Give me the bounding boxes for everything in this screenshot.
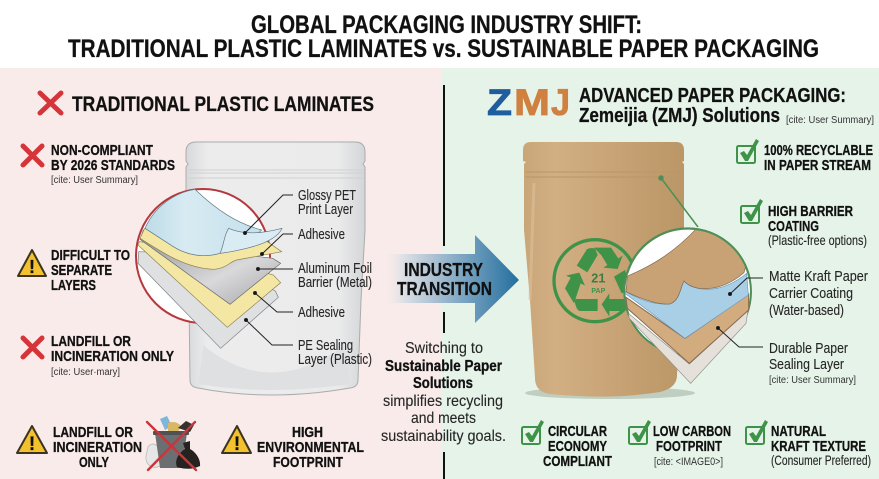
text: landfill or incineration only	[53, 424, 142, 471]
heading: advanced paper packaging	[579, 85, 874, 127]
kraft pouch	[523, 142, 684, 397]
icon: warning difficult	[18, 250, 46, 277]
icon: cross landfill	[23, 338, 42, 357]
text: landfill or incineration	[51, 333, 174, 378]
laminate layers	[138, 189, 282, 348]
icon: heading cross	[40, 93, 61, 113]
icon: warning landfill: !	[29, 434, 35, 455]
text: low carbon	[653, 423, 731, 468]
text: non-compliant	[51, 142, 175, 186]
magnifier: paper layers	[624, 227, 757, 383]
recycle badge	[554, 240, 636, 322]
text: landfill or incineration only: INCINERATION	[53, 439, 142, 456]
layer labels: Barrier (Metal)	[298, 274, 372, 291]
text: high barrier: HIGH BARRIER	[768, 203, 853, 220]
logo: ZMJ	[487, 82, 570, 123]
arrow: industry transition	[383, 235, 519, 323]
layer labels: Adhesive	[298, 304, 345, 321]
icon: cross non-compliant	[23, 146, 42, 165]
arrow: industry transition: INDUSTRY	[404, 260, 483, 280]
text: high environmental footprint: ENVIRONMENTAL	[257, 439, 364, 456]
icon: warning landfill	[17, 426, 47, 455]
leader lines	[244, 195, 293, 345]
text: difficult to separate	[51, 247, 130, 294]
icon: check kraft	[746, 420, 768, 444]
text: transition summary: Switching to	[405, 340, 483, 357]
text: transition summary: simplifies recycling	[383, 393, 503, 410]
layer: PE sealing	[138, 252, 278, 348]
paper layer labels	[769, 268, 868, 386]
layer: aluminum foil	[140, 230, 281, 304]
paper leader lines	[716, 278, 763, 347]
paper layer labels: (Water-based)	[769, 302, 844, 319]
icon: warning footprint: !	[234, 434, 240, 455]
text: low carbon: LOW CARBON	[653, 423, 731, 440]
text: circular economy: COMPLIANT	[543, 453, 612, 470]
magnifier circle	[136, 189, 270, 323]
text: natural kraft: NATURAL	[771, 423, 826, 440]
icon: warning footprint	[222, 426, 251, 455]
logo: ZMJ: M	[514, 82, 550, 123]
title: GLOBAL PACKAGING INDUSTRY SHIFT:	[251, 11, 642, 39]
text: high environmental footprint: HIGH	[292, 424, 323, 441]
icon: check low carbon	[629, 420, 651, 444]
layer labels: PE Sealing	[298, 337, 353, 354]
layer labels	[298, 187, 372, 368]
text: landfill or incineration only: ONLY	[79, 454, 109, 471]
text: natural kraft	[771, 423, 871, 468]
text: low carbon: [cite: <IMAGE0>]	[654, 456, 723, 468]
paper layer labels: Durable Paper	[769, 340, 848, 357]
text: difficult to separate: SEPARATE	[51, 262, 112, 279]
icon: check circular	[522, 420, 544, 444]
divider	[443, 85, 445, 479]
layer: durable kraft	[626, 294, 749, 363]
icon: check recyclable	[737, 139, 759, 163]
panel: traditional plastic laminates	[17, 93, 374, 471]
text: high environmental footprint	[257, 424, 364, 471]
icon: warning difficult: !	[29, 257, 35, 277]
layer labels: Adhesive	[298, 226, 345, 243]
leader: pouch to detail	[659, 176, 698, 227]
kraft pouch shadow	[525, 387, 695, 399]
paper layer labels: [cite: User Summary]	[769, 375, 856, 386]
text: non-compliant: [cite: User Summary]	[51, 175, 138, 186]
layer: adhesive upper	[140, 228, 282, 269]
plastic pouch	[186, 142, 365, 395]
text: high environmental footprint: FOOTPRINT	[273, 454, 343, 471]
text: landfill or incineration: INCINERATION ONLY	[51, 348, 174, 365]
panel: left background	[0, 68, 442, 479]
magnifier circle	[624, 228, 751, 355]
paper layer labels: Carrier Coating	[769, 285, 853, 302]
heading: advanced paper packaging: Zemeijia (ZMJ) Solutions	[579, 105, 780, 127]
icon: crossed-out trash can	[146, 416, 200, 470]
paper layer labels: Sealing Layer	[769, 356, 844, 373]
layer labels: Glossy PET	[298, 187, 356, 204]
text: landfill or incineration: LANDFILL OR	[51, 333, 131, 350]
recycle badge: PAP	[591, 288, 606, 295]
logo: ZMJ: J	[551, 82, 570, 123]
heading: traditional plastic laminates: TRADITIONAL PLASTIC LAMINATES	[72, 93, 374, 116]
arrow: industry transition: TRANSITION	[397, 279, 492, 299]
layer labels: Aluminum Foil	[298, 260, 372, 277]
text: circular economy: CIRCULAR	[548, 423, 607, 440]
layer: sealing	[628, 310, 748, 383]
text: transition summary: and meets	[411, 410, 476, 427]
text: low carbon: FOOTPRINT	[656, 438, 722, 455]
layer labels: Layer (Plastic)	[298, 351, 372, 368]
layer: blue coating	[625, 273, 748, 338]
title	[68, 11, 819, 63]
layer: PET curl	[220, 228, 282, 253]
text: recyclable	[764, 142, 873, 174]
text: difficult to separate: DIFFICULT TO	[51, 247, 130, 264]
text: transition summary	[381, 340, 506, 445]
icon: check barrier	[741, 199, 763, 223]
text: landfill or incineration only: LANDFILL OR	[53, 424, 133, 441]
text: circular economy	[543, 423, 612, 470]
layer: adhesive lower	[138, 242, 281, 327]
panel: right background	[442, 68, 879, 479]
text: high barrier	[768, 203, 867, 248]
layer: glossy PET	[145, 189, 262, 256]
circle top outline	[627, 229, 749, 277]
text: transition summary: Solutions	[413, 375, 473, 392]
heading: advanced paper packaging: [cite: User Summary]	[786, 115, 874, 126]
layer: matte kraft	[626, 230, 746, 304]
text: high barrier: COATING	[768, 218, 819, 235]
layer labels: Print Layer	[298, 201, 353, 218]
text: landfill or incineration: [cite: User·mary]	[51, 367, 120, 378]
logo: ZMJ: Z	[487, 82, 512, 123]
recycle badge: 21	[591, 272, 605, 286]
text: transition summary: Sustainable Paper	[385, 358, 502, 375]
text: non-compliant: NON-COMPLIANT	[51, 142, 153, 159]
text: transition summary: sustainability goals.	[381, 428, 506, 445]
text: non-compliant: BY 2026 STANDARDS	[51, 157, 175, 174]
text: difficult to separate: LAYERS	[51, 277, 96, 294]
panel: advanced paper packaging	[487, 82, 874, 470]
text: circular economy: ECONOMY	[548, 438, 607, 455]
